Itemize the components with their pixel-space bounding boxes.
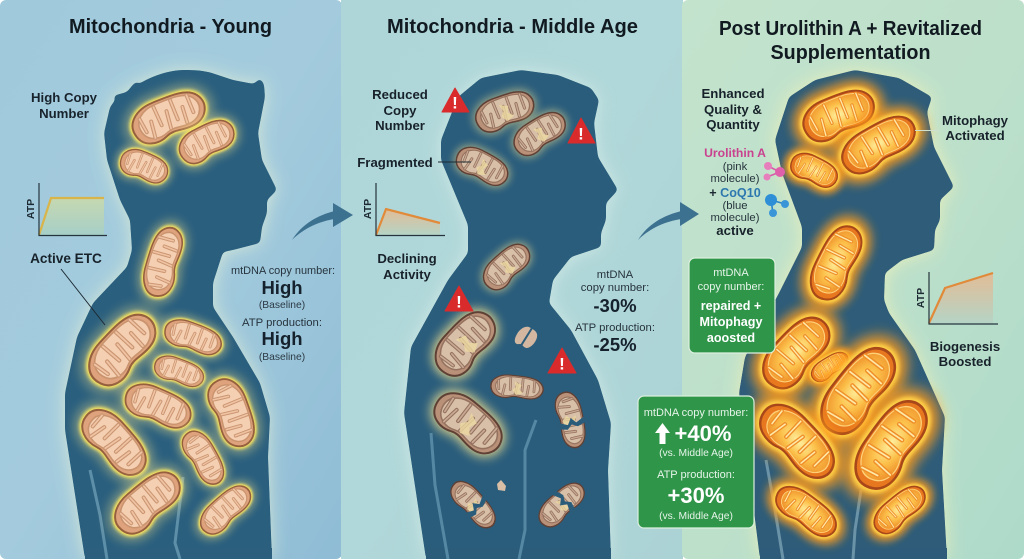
stats: middle age	[575, 269, 655, 355]
label: declining activity: Declining	[377, 251, 437, 266]
warning icon 3: !	[456, 292, 462, 312]
mitochondrion: lower middle	[178, 425, 229, 490]
title: middle age: Mitochondria - Middle Age	[387, 15, 638, 38]
leader line: fragmented	[438, 161, 471, 163]
label: urolithin A and CoQ10: Urolithin A	[704, 146, 766, 160]
warning icon 1: !	[452, 94, 458, 112]
label: mitophagy activated: Mitophagy	[942, 113, 1009, 128]
label: urolithin A and CoQ10: active	[716, 223, 754, 238]
callout: repaired and mitophagy: aoosted	[707, 331, 755, 345]
mitochondrion: brain lower	[452, 140, 513, 192]
mitochondrion: chest right	[161, 314, 225, 361]
chart: ATP middle age	[362, 183, 445, 236]
warning icon 3	[445, 286, 473, 312]
label: active ETC: Active ETC	[30, 251, 102, 266]
label: enhanced quality and quantity: Quality &	[704, 102, 762, 117]
panel: young	[25, 15, 335, 559]
callout: gains vs middle age: (vs. Middle Age)	[659, 511, 733, 522]
mitochondrion: brain right	[174, 115, 240, 168]
callout: gains vs middle age	[638, 396, 754, 528]
callout: gains vs middle age: ATP production:	[657, 469, 735, 481]
leader line: mitophagy	[915, 130, 939, 132]
mitochondrion: damaged upper	[426, 304, 505, 383]
mitochondrion: neck	[477, 238, 537, 295]
label: reduced copy number: Copy	[384, 103, 417, 118]
mitochondrion: brain right	[834, 109, 923, 180]
stats: middle age: ATP production:	[575, 322, 655, 334]
label: urolithin A and CoQ10: (blue	[722, 200, 748, 212]
mitochondrion: neck	[802, 220, 871, 306]
mitochondrion: brain large	[797, 84, 880, 146]
mitochondrion: lower left	[75, 400, 154, 484]
mitochondrion: side	[204, 374, 260, 451]
mitochondrion: lower right	[843, 392, 939, 497]
stats: young	[231, 265, 335, 363]
mitochondrion: chest centre	[809, 338, 907, 443]
fragment: shard	[497, 480, 506, 491]
label: biogenesis boosted: Biogenesis	[930, 339, 1000, 354]
mitochondrion: brain right	[508, 107, 571, 160]
chart: ATP middle age: ATP	[362, 199, 374, 219]
callout: gains vs middle age: (vs. Middle Age)	[659, 448, 733, 459]
panel: middle age	[357, 15, 655, 559]
stats: young: (Baseline)	[259, 300, 305, 311]
label: enhanced quality and quantity: Quantity	[706, 117, 760, 132]
panel: post supplementation	[638, 17, 1009, 559]
mitochondrion: bottom right	[867, 480, 932, 539]
mitochondrion: chest left	[78, 306, 166, 393]
chart: ATP young: ATP	[25, 199, 37, 219]
label: urolithin A and CoQ10	[704, 146, 766, 238]
leader line: active ETC	[61, 269, 105, 325]
mitochondrion: bottom left	[770, 478, 843, 544]
callout: repaired and mitophagy: repaired +	[701, 299, 761, 313]
label: fragmented: Fragmented	[357, 155, 433, 170]
body silhouette: young	[65, 70, 277, 559]
icon: blue molecule	[765, 194, 789, 217]
callout: gains vs middle age: mtDNA copy number:	[644, 407, 748, 419]
warning icon 4	[548, 348, 576, 374]
body silhouette: post supplementation	[739, 70, 954, 559]
chart: ATP young	[25, 183, 107, 236]
callout: gains vs middle age: +30%	[668, 483, 724, 508]
warning icon 2	[568, 118, 595, 144]
label: mitophagy activated: Activated	[945, 128, 1005, 143]
callout: repaired and mitophagy: copy number:	[698, 281, 764, 293]
label: high copy number: Number	[39, 106, 89, 121]
arrow: middle age to post supplementation	[638, 202, 699, 240]
stats: young: High	[261, 328, 303, 349]
stats: middle age: -30%	[593, 295, 637, 316]
mitochondrion: brain large	[471, 87, 538, 136]
warning icon 2: !	[578, 124, 584, 144]
mitochondrion: neck	[137, 224, 189, 300]
warning icon 1	[442, 88, 469, 112]
stats: middle age: mtDNA	[597, 269, 634, 281]
stats: young: (Baseline)	[259, 352, 305, 363]
mitochondrion: brain small	[116, 144, 172, 189]
label: reduced copy number: Number	[375, 118, 425, 133]
mitochondrion: chest middle	[151, 351, 207, 392]
label: urolithin A and CoQ10: molecule)	[711, 173, 760, 185]
chart: ATP boosted	[915, 272, 998, 324]
mitochondrion: brain large	[126, 86, 211, 149]
icon: up arrow	[655, 423, 670, 444]
label: urolithin A and CoQ10: (pink	[723, 161, 748, 173]
label: reduced copy number: Reduced	[372, 87, 428, 102]
mitochondrion: upper left	[752, 309, 840, 396]
icon: pink molecule	[764, 162, 785, 180]
fragment: split	[512, 323, 540, 353]
label: declining activity: Activity	[383, 267, 431, 282]
label: enhanced quality and quantity: Enhanced	[701, 86, 765, 101]
stats: young: High	[261, 277, 303, 298]
mitochondrion: centre	[120, 377, 196, 436]
callout: repaired and mitophagy	[689, 258, 775, 353]
mitochondrion: lower left	[752, 394, 843, 489]
mitochondrion: broken right	[532, 477, 592, 534]
mitochondrion: broken left	[444, 475, 502, 535]
title: post supplementation: Supplementation	[770, 41, 930, 64]
stats: young: mtDNA copy number:	[231, 265, 335, 277]
warning icon 4: !	[559, 354, 565, 374]
title: young: Mitochondria - Young	[69, 15, 272, 38]
callout: repaired and mitophagy: Mitophagy	[700, 315, 762, 329]
mitochondrion: bottom left	[106, 464, 189, 541]
callout: gains vs middle age: +40%	[675, 421, 731, 446]
callout: repaired and mitophagy: mtDNA	[713, 267, 749, 279]
body silhouette: middle age	[404, 70, 618, 559]
title: post supplementation: Post Urolithin A + Revitalized	[719, 17, 982, 40]
chart: ATP boosted: ATP	[915, 288, 927, 308]
mitochondrion: bottom right	[194, 480, 257, 540]
stats: middle age: -25%	[593, 334, 637, 355]
label: biogenesis boosted: Boosted	[939, 354, 991, 369]
label: urolithin A and CoQ10: + CoQ10	[709, 186, 761, 200]
mitochondrion: small middle	[807, 348, 852, 385]
stats: young: ATP production:	[242, 317, 322, 329]
mitochondrion: centre	[489, 372, 545, 403]
mitochondrion: side	[551, 390, 589, 450]
arrow: young to middle age	[292, 203, 353, 240]
label: high copy number: High Copy	[31, 90, 98, 105]
mitochondrion: brain small	[787, 147, 842, 194]
label: urolithin A and CoQ10: molecule)	[711, 212, 760, 224]
mitochondrion: damaged lower	[427, 383, 510, 464]
stats: middle age: copy number:	[581, 282, 649, 294]
